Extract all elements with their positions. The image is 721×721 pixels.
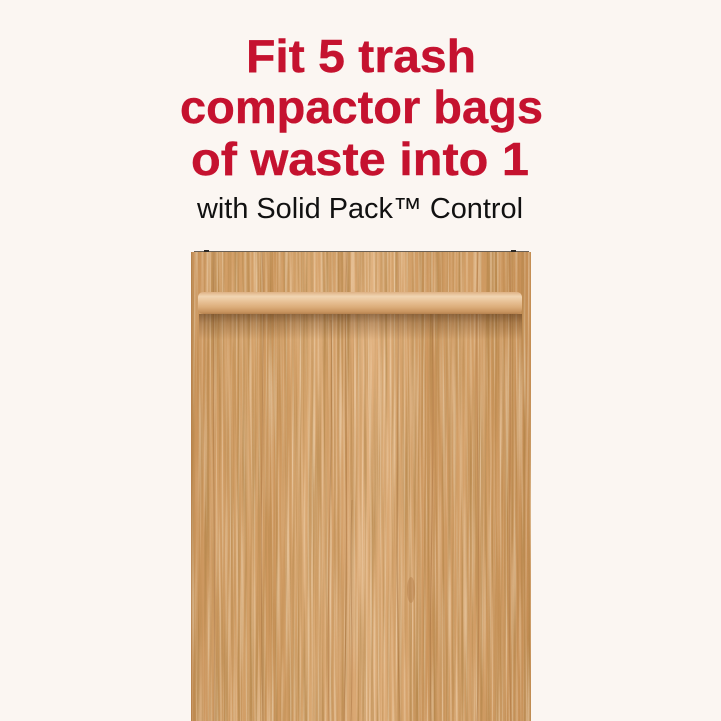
- handle: [198, 292, 522, 314]
- top edge of dishwasher: [194, 250, 529, 252]
- subtitle: with Solid Pack™ Control: [196, 193, 523, 225]
- title: [180, 30, 543, 185]
- title: of waste into 1: [191, 133, 529, 185]
- title: Fit 5 trash: [246, 30, 476, 82]
- wood appliance panel: [191, 250, 531, 721]
- title: compactor bags: [180, 81, 543, 133]
- wood knot: [407, 577, 415, 603]
- left edge shadow: [191, 252, 192, 721]
- wood door surface: [191, 252, 531, 721]
- shadow under handle: [199, 314, 522, 340]
